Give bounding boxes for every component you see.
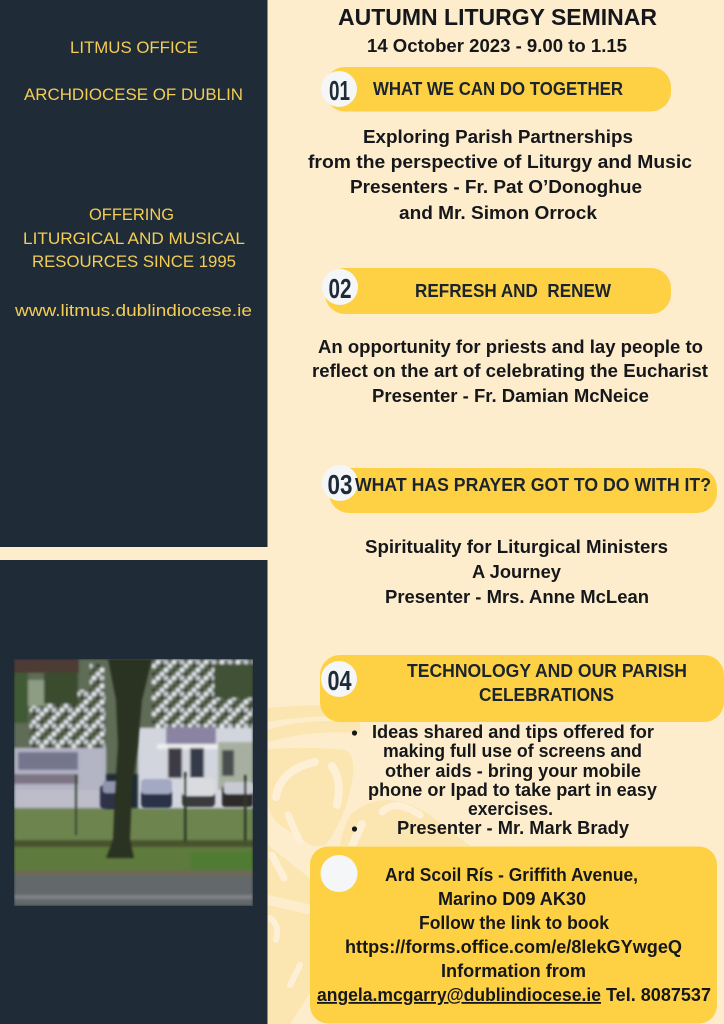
decorative lemon slice watermark xyxy=(268,705,470,1024)
section 04 bullet list: exercises. xyxy=(468,799,553,819)
panel: title block xyxy=(338,4,657,56)
fence posts xyxy=(75,775,77,835)
venue and booking panel: https://forms.office.com/e/8lekGYwgeQ xyxy=(345,937,682,957)
section 04 header pill: CELEBRATIONS xyxy=(479,685,614,705)
section 04 header pill xyxy=(320,655,724,722)
venue and booking panel: Information from xyxy=(441,961,586,981)
section 04 bullet list: other aids - bring your mobile xyxy=(385,761,641,781)
section 02 body text: reflect on the art of celebrating the Eucharist xyxy=(312,361,708,381)
section 03 body text: A Journey xyxy=(472,562,561,582)
offering text xyxy=(23,205,245,271)
venue and booking panel: Ard Scoil Rís - Griffith Avenue, xyxy=(385,865,638,885)
section 04 header pill: TECHNOLOGY AND OUR PARISH xyxy=(407,661,687,681)
section 01 body text: Exploring Parish Partnerships xyxy=(363,127,633,147)
offering text: LITURGICAL AND MUSICAL xyxy=(23,229,245,248)
section 03 header pill: WHAT HAS PRAYER GOT TO DO WITH IT? xyxy=(355,475,711,495)
website: www.litmus.dublindiocese.ie xyxy=(14,301,252,320)
section 03 header pill: 03 xyxy=(328,469,352,500)
tree trunk xyxy=(106,659,152,858)
panel: lower left dark sidebar xyxy=(0,560,268,1024)
section 03 body text: Spirituality for Liturgical Ministers xyxy=(365,537,668,557)
date and time: 14 October 2023 - 9.00 to 1.15 xyxy=(367,36,627,56)
section 01 header pill xyxy=(321,67,671,112)
section 04 header pill: 04 xyxy=(328,665,352,696)
section 01 body text xyxy=(308,127,692,223)
office heading: LITMUS OFFICE xyxy=(70,38,198,57)
section 02 header pill xyxy=(322,268,671,314)
venue and booking panel xyxy=(310,846,717,1024)
section 04 bullet list xyxy=(352,722,657,838)
venue and booking panel: Marino D09 AK30 xyxy=(438,889,586,909)
venue and booking panel: angela.mcgarry@dublindiocese.ie xyxy=(317,985,601,1005)
venue and booking panel: Follow the link to book xyxy=(419,913,610,933)
section 04 bullet list: making full use of screens and xyxy=(383,741,642,761)
offering text: OFFERING xyxy=(89,205,174,224)
panel: upper left dark sidebar xyxy=(0,0,268,547)
section 03 body text xyxy=(365,537,668,607)
title: AUTUMN LITURGY SEMINAR xyxy=(338,4,657,30)
section 02 body text: An opportunity for priests and lay people to xyxy=(318,337,703,357)
section 02 body text: Presenter - Fr. Damian McNeice xyxy=(372,386,649,406)
section 01 body text: Presenters - Fr. Pat O’Donoghue xyxy=(350,177,642,197)
section 03 header pill xyxy=(322,465,717,513)
office heading: ARCHDIOCESE OF DUBLIN xyxy=(24,85,243,104)
section 03 body text: Presenter - Mrs. Anne McLean xyxy=(385,587,649,607)
section 04 bullet list: Ideas shared and tips offered for xyxy=(372,722,654,742)
venue and booking panel: Tel. 8087537 xyxy=(606,985,711,1005)
section 01 body text: and Mr. Simon Orrock xyxy=(399,203,598,223)
office heading xyxy=(24,38,243,104)
section 04 bullet list: phone or Ipad to take part in easy xyxy=(368,780,657,800)
cars xyxy=(98,784,116,810)
photo: school building behind tree xyxy=(14,659,253,906)
section 02 header pill: REFRESH AND RENEW xyxy=(415,281,611,301)
section 02 header pill: 02 xyxy=(328,273,352,304)
section 01 header pill: WHAT WE CAN DO TOGETHER xyxy=(373,79,623,99)
section 01 header pill: 01 xyxy=(329,75,350,106)
section 02 body text xyxy=(312,337,708,406)
section 04 bullet list: Presenter - Mr. Mark Brady xyxy=(397,818,629,838)
section 01 body text: from the perspective of Liturgy and Music xyxy=(308,152,692,172)
offering text: RESOURCES SINCE 1995 xyxy=(32,252,236,271)
